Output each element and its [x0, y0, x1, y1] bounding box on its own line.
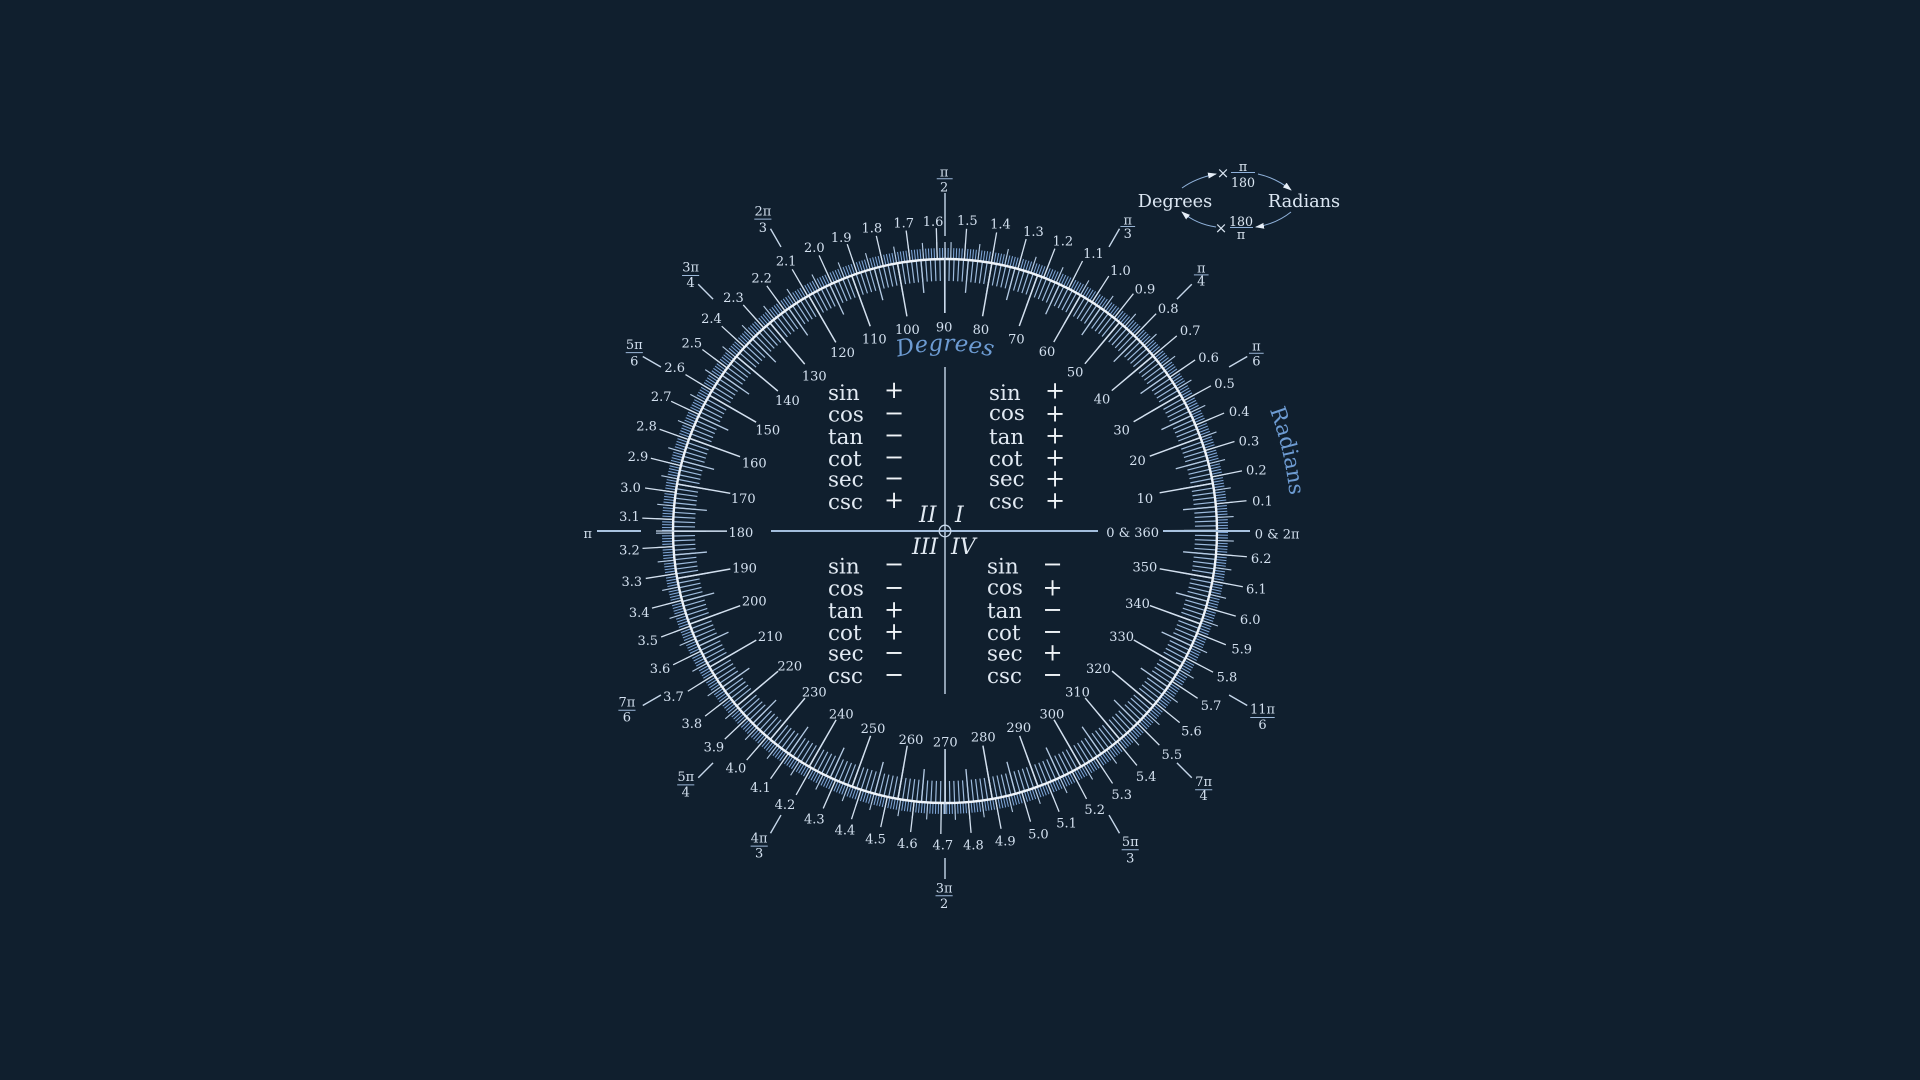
radian labels: 4.8: [963, 838, 984, 853]
function names: [828, 554, 864, 689]
function names: csc: [828, 490, 863, 515]
function names: [989, 381, 1025, 514]
function names: cos: [828, 576, 864, 602]
90 tick: [944, 242, 946, 313]
signs: −: [884, 421, 904, 449]
degree labels: 270: [933, 736, 958, 751]
radian labels: 1.2: [1053, 235, 1073, 250]
radian labels: 2.4: [701, 312, 722, 327]
quadrant II table: [828, 376, 904, 515]
bottom formula: π: [1237, 227, 1245, 242]
degree labels: 60: [1039, 345, 1055, 360]
quadrant vertical axis: [944, 367, 946, 694]
270 tick: [944, 749, 946, 814]
function names: sin: [828, 554, 860, 580]
quadrant numerals: I: [954, 503, 965, 528]
degree labels: 160: [742, 456, 767, 471]
radian labels: 5.8: [1217, 671, 1237, 686]
arrows: [1182, 174, 1291, 227]
pi fraction labels: 4: [1200, 789, 1208, 804]
function names: sin: [989, 381, 1021, 406]
radian labels: 5.3: [1111, 788, 1132, 803]
degree labels: 250: [861, 722, 885, 737]
radian labels: 4.5: [865, 832, 886, 847]
function names: cos: [989, 401, 1025, 426]
signs: +: [1045, 400, 1065, 428]
function names: sec: [987, 642, 1023, 666]
function names: sin: [828, 381, 860, 406]
pi fraction labels: 3π: [682, 261, 699, 276]
pi fraction labels: 4: [682, 785, 690, 800]
pi fraction labels: π: [1197, 261, 1206, 276]
signs: −: [884, 550, 904, 578]
degree labels: 20: [1129, 454, 1146, 469]
radian labels: 5.6: [1181, 725, 1202, 740]
function names: cot: [987, 621, 1021, 646]
radian labels: 1.8: [862, 221, 882, 236]
quadrant numerals: III: [911, 535, 939, 560]
radian labels: 3.9: [704, 740, 724, 755]
radian labels: 1.7: [893, 216, 914, 231]
radian labels: 4.6: [897, 837, 918, 852]
degree labels: 280: [971, 731, 996, 746]
degree labels: 180: [728, 526, 753, 541]
pi fraction labels: 6: [1252, 354, 1260, 369]
radian labels: 0.6: [1198, 351, 1219, 366]
signs: [1042, 550, 1063, 688]
degree five-step ticks: [690, 276, 1200, 786]
radian labels: 3.8: [682, 717, 702, 732]
degree labels: 220: [777, 660, 802, 675]
radian labels: 3.7: [663, 690, 684, 705]
pi fraction labels: 3: [759, 221, 767, 236]
zero tick: [1163, 530, 1250, 532]
pi fraction labels: [583, 166, 1275, 912]
signs: +: [1045, 464, 1065, 492]
degree labels: 170: [731, 492, 756, 507]
pi fraction labels: 6: [623, 711, 631, 726]
pi fraction labels: 4π: [751, 831, 768, 846]
signs: −: [1042, 596, 1063, 624]
pi fraction labels: 6: [1258, 718, 1267, 733]
degree labels: 0 & 360: [1106, 526, 1159, 541]
pi fraction labels: 5π: [1122, 835, 1139, 850]
top formula: π: [1239, 159, 1247, 174]
radian minor ticks: [668, 254, 1222, 808]
degree minor ticks: [684, 270, 1206, 792]
quadrant III table: [828, 550, 904, 689]
radian labels: 1.5: [957, 214, 978, 229]
pi fraction labels: 7π: [1195, 775, 1213, 790]
curved title: Radians: Radians: [1270, 406, 1300, 494]
degree ten-step ticks: [700, 286, 1190, 776]
signs: [884, 376, 904, 514]
radian labels: 0.9: [1135, 282, 1155, 297]
radian labels: 4.1: [750, 781, 771, 796]
pi fraction labels: 2: [940, 180, 948, 195]
signs: +: [1045, 444, 1065, 472]
quadrant horizontal axis: [771, 530, 1098, 532]
pi fraction labels: 2: [940, 897, 948, 912]
degree labels: [728, 320, 1159, 751]
degree labels: 340: [1125, 597, 1150, 612]
degree labels: 150: [755, 423, 780, 438]
function names: csc: [989, 490, 1024, 514]
radian labels: 4.2: [775, 798, 795, 813]
function names: csc: [828, 664, 863, 689]
function names: tan: [989, 425, 1024, 450]
pi fraction labels: 2π: [754, 204, 772, 219]
function names: cos: [987, 576, 1023, 600]
degree labels: 300: [1039, 707, 1064, 722]
radian labels: 0.1: [1252, 494, 1273, 509]
quadrant numerals: IV: [950, 535, 978, 560]
signs: −: [1042, 660, 1063, 688]
signs: −: [1042, 618, 1063, 646]
function names: cos: [828, 402, 864, 428]
Radians label: Radians: [1268, 192, 1340, 212]
radian labels: 0.5: [1214, 377, 1235, 392]
radian labels: 1.6: [923, 215, 943, 230]
signs: −: [884, 574, 904, 602]
degree labels: 330: [1109, 630, 1134, 645]
function names: tan: [828, 599, 863, 624]
radian labels: 2.3: [723, 291, 744, 306]
quadrant IV table: [987, 550, 1063, 689]
signs: +: [1042, 638, 1063, 666]
quadrant numerals: [911, 503, 978, 560]
top formula: ×: [1217, 164, 1229, 182]
degree labels: 120: [830, 346, 855, 361]
signs: +: [1045, 486, 1065, 514]
function names: [828, 381, 864, 515]
radian labels: 3.0: [620, 481, 641, 496]
degree labels: 90: [936, 320, 952, 335]
radian labels: 1.0: [1110, 264, 1131, 279]
radian 0.1 ticks: [658, 244, 1232, 818]
radian labels: 2.6: [664, 361, 685, 376]
pi fraction labels: 5π: [626, 338, 643, 353]
degree labels: 260: [899, 733, 923, 748]
radian labels: 3.5: [637, 634, 658, 649]
radian labels: 1.9: [831, 231, 852, 246]
signs: +: [884, 376, 904, 404]
pi fraction labels: 7π: [619, 695, 636, 710]
radian labels: 5.9: [1231, 642, 1252, 657]
degree labels: 70: [1008, 333, 1025, 348]
signs: +: [1045, 422, 1065, 450]
radian labels: 2.9: [628, 450, 648, 465]
pi fraction labels: 3: [755, 847, 763, 862]
axis ticks: [656, 242, 1250, 814]
radian labels: 0.8: [1158, 302, 1178, 317]
pi fraction labels: π: [1252, 340, 1261, 355]
radian labels: 6.2: [1251, 552, 1272, 567]
radian labels: 5.5: [1162, 748, 1182, 763]
signs: −: [884, 464, 904, 492]
signs: +: [884, 486, 904, 514]
pi fraction labels: 6: [630, 354, 638, 369]
radian labels: 5.0: [1028, 827, 1049, 842]
radian labels: 0 & 2π: [1255, 527, 1300, 542]
radian labels: 4.0: [726, 761, 746, 776]
radian labels: 3.4: [629, 606, 650, 621]
quadrant I table: [989, 376, 1065, 514]
radian labels: 2.0: [804, 241, 825, 256]
degree labels: 240: [829, 707, 854, 722]
signs: −: [884, 399, 904, 427]
degree labels: 350: [1133, 560, 1157, 575]
degree labels: 110: [862, 333, 887, 348]
radian labels: 3.1: [619, 510, 640, 525]
degree labels: 30: [1113, 423, 1130, 438]
degree labels: 190: [732, 562, 757, 577]
pi fraction labels: 11π: [1250, 703, 1275, 718]
radian labels: [619, 214, 1300, 853]
signs: [884, 550, 904, 688]
signs: −: [884, 660, 904, 688]
radian labels: 5.2: [1084, 803, 1105, 818]
degree labels: 320: [1086, 662, 1111, 677]
degree labels: 80: [973, 323, 989, 338]
degree labels: 50: [1067, 366, 1083, 381]
radian labels: 0.4: [1229, 405, 1250, 420]
radian labels: 6.0: [1240, 613, 1261, 628]
radian labels: 4.4: [835, 824, 855, 839]
radian labels: 3.2: [619, 543, 640, 558]
function names: sec: [989, 467, 1025, 492]
signs: [1045, 376, 1065, 514]
degree labels: 140: [775, 394, 800, 409]
function names: sec: [828, 642, 864, 666]
function names: sec: [828, 468, 864, 492]
pi fraction labels: 3: [1124, 227, 1132, 242]
180 tick: [656, 530, 727, 532]
radian labels: 5.7: [1201, 699, 1221, 714]
top formula: [1217, 159, 1255, 190]
radian labels: 1.4: [990, 218, 1011, 233]
radian labels: 4.3: [804, 813, 825, 828]
degree labels: 230: [802, 685, 827, 700]
function names: cot: [828, 621, 862, 646]
pi fraction labels: 4: [686, 276, 695, 291]
bottom formula: 180: [1229, 214, 1253, 229]
pi multiple leader lines: [597, 193, 1247, 879]
bottom formula: [1215, 214, 1253, 242]
radian labels: 0.2: [1246, 464, 1267, 479]
radian labels: 0.7: [1180, 324, 1201, 339]
function names: cot: [828, 447, 862, 472]
signs: −: [1042, 550, 1063, 578]
signs: +: [1042, 574, 1063, 602]
function names: sin: [987, 554, 1019, 580]
top formula: 180: [1231, 175, 1255, 190]
degree labels: 40: [1094, 393, 1110, 408]
radian labels: 2.1: [776, 254, 796, 269]
pi fraction labels: 4: [1197, 275, 1205, 290]
radian labels: 2.7: [651, 390, 672, 405]
degree labels: 100: [895, 323, 920, 338]
radian labels: 2.5: [682, 336, 702, 351]
radian labels: 4.7: [933, 838, 953, 853]
degree labels: 130: [802, 369, 827, 384]
radian labels: 1.1: [1083, 247, 1104, 262]
radian labels: 5.1: [1056, 816, 1077, 831]
function names: cot: [989, 447, 1023, 472]
radian ticks: [658, 244, 1232, 818]
signs: −: [884, 638, 904, 666]
pi fraction labels: π: [1123, 214, 1132, 229]
function names: tan: [828, 425, 863, 450]
radian labels: 4.9: [995, 835, 1016, 850]
unit circle dial: [597, 193, 1300, 879]
pi fraction labels: π: [583, 527, 592, 542]
curved title: Degrees: Degrees: [897, 338, 994, 357]
signs: +: [884, 618, 904, 646]
signs: +: [884, 596, 904, 624]
pi fraction labels: 5π: [677, 770, 695, 785]
radian labels: 1.3: [1023, 225, 1044, 240]
function names: [987, 554, 1023, 689]
pi fraction labels: 3: [1126, 851, 1134, 866]
radian labels: 0.3: [1239, 434, 1259, 449]
radian labels: 3.3: [622, 575, 642, 590]
conversion diagram: [1138, 159, 1340, 242]
degree labels: 210: [758, 630, 783, 645]
function names: csc: [987, 664, 1022, 689]
signs: +: [1045, 376, 1065, 404]
origin marker: [939, 525, 951, 537]
signs: −: [884, 443, 904, 471]
degree labels: 10: [1137, 492, 1153, 507]
degree labels: 200: [742, 595, 767, 610]
bottom formula: ×: [1215, 219, 1227, 237]
quadrant numerals: II: [918, 503, 938, 528]
radian labels: 3.6: [650, 662, 670, 677]
degree labels: 310: [1065, 685, 1090, 700]
pi fraction labels: 3π: [936, 881, 953, 896]
main circle: [673, 259, 1217, 803]
function names: tan: [987, 599, 1022, 624]
radian 0.05 ticks: [664, 250, 1226, 812]
radian labels: 2.8: [636, 420, 657, 435]
pi fraction labels: π: [940, 166, 949, 181]
degree labels: 290: [1006, 721, 1031, 736]
radian labels: 5.4: [1136, 770, 1156, 785]
radian labels: 6.1: [1246, 582, 1267, 597]
Degrees label: Degrees: [1138, 192, 1212, 212]
radian labels: 2.2: [751, 271, 772, 286]
